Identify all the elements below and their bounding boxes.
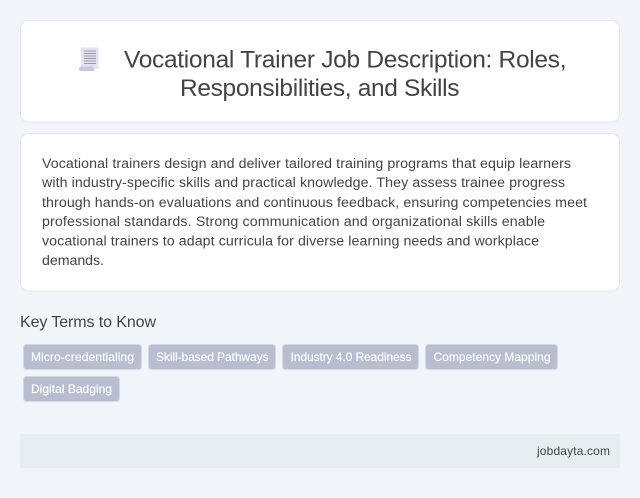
tag: competency mapping — [426, 344, 558, 370]
panel: description — [20, 134, 620, 291]
tag: industry 4.0 readiness: Industry 4.0 Readiness — [290, 350, 412, 364]
heading: key terms: Key Terms to Know — [20, 314, 156, 331]
tags — [24, 344, 558, 402]
description text: demands. — [42, 253, 104, 269]
tag: micro-credentialing — [24, 344, 142, 370]
footer — [20, 434, 620, 468]
tag: industry 4.0 readiness — [282, 344, 418, 370]
description text: vocational trainers to adapt curricula for diverse learning needs and workplace — [42, 234, 539, 250]
tag: skill-based pathways — [148, 344, 276, 370]
tag: competency mapping: Competency Mapping — [434, 350, 550, 364]
tag: digital badging — [24, 376, 120, 402]
tag: micro-credentialing: Micro-credentialing — [31, 350, 134, 364]
title line 1: Vocational Trainer Job Description: Roles, — [124, 46, 566, 74]
title line 2: Responsibilities, and Skills — [180, 75, 460, 102]
tag: digital badging: Digital Badging — [31, 382, 112, 396]
description text: professional standards. Strong communication and organizational skills enable — [42, 214, 545, 230]
description text: with industry-specific skills and practical knowledge. They assess trainee progress — [41, 175, 565, 191]
icon: document scroll — [79, 48, 98, 71]
description text: through hands-on evaluations and continuous feedback, ensuring competencies meet — [42, 195, 587, 211]
panel: title header — [20, 20, 620, 122]
footer source: jobdayta.com — [536, 444, 610, 458]
tag: skill-based pathways: Skill-based Pathways — [156, 350, 268, 364]
description text — [41, 156, 587, 269]
description text: Vocational trainers design and deliver tailored training programs that equip learners — [42, 156, 571, 172]
